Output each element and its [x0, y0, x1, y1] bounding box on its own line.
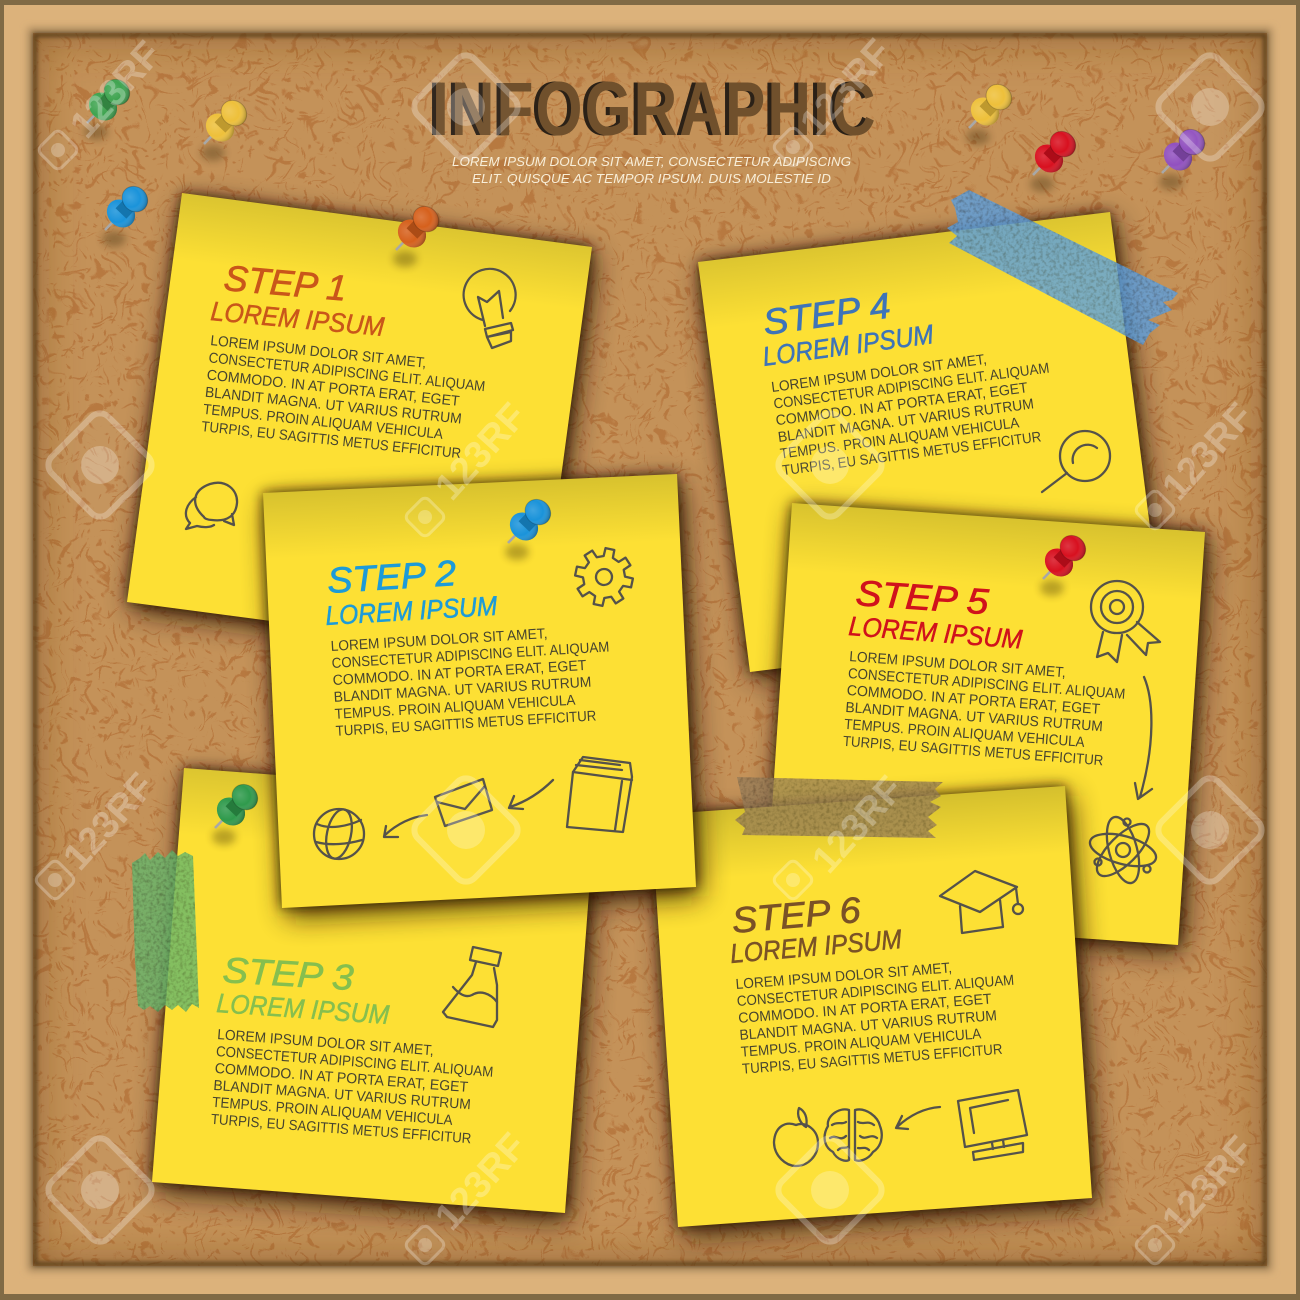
step 1 body text: BLANDIT MAGNA. UT VARIUS RUTRUM — [204, 385, 462, 428]
step 5 body text: TURPIS, EU SAGITTIS METUS EFFICITUR — [842, 734, 1104, 769]
icon: book — [567, 757, 632, 832]
panel: step 6 note — [651, 786, 1097, 1236]
step 4 body text: CONSECTETUR ADIPISCING ELIT. ALIQUAM — [773, 360, 1050, 413]
step 2 body text: TURPIS, EU SAGITTIS METUS EFFICITUR — [335, 708, 597, 740]
step 3 body text: LOREM IPSUM DOLOR SIT AMET, — [217, 1027, 434, 1059]
tape: green — [132, 850, 199, 1012]
watermark: 123RF — [1154, 396, 1262, 508]
arrow: computer to brain — [896, 1107, 940, 1129]
step 4 body text: TURPIS, EU SAGITTIS METUS EFFICITUR — [781, 429, 1042, 479]
step 6 body text: BLANDIT MAGNA. UT VARIUS RUTRUM — [739, 1008, 997, 1044]
title: INFOGRAPHIC — [428, 66, 874, 152]
icon: envelope — [435, 779, 492, 826]
step 3 body text: COMMODO. IN AT PORTA ERAT, EGET — [214, 1061, 469, 1096]
step 6 heading: STEP 6 — [730, 889, 863, 941]
step 3 body text: TEMPUS. PROIN ALIQUAM VEHICULA — [212, 1095, 453, 1129]
step 2 body text — [330, 623, 614, 740]
step 6 body text: LOREM IPSUM DOLOR SIT AMET, — [735, 960, 953, 993]
icon: flask — [443, 947, 501, 1027]
step 2 body text: BLANDIT MAGNA. UT VARIUS RUTRUM — [333, 675, 592, 706]
step 4 subheading: LOREM IPSUM — [761, 319, 936, 372]
watermark: 123RF — [1154, 1129, 1262, 1241]
icon: award ribbon — [1091, 581, 1160, 662]
icon: light bulb — [464, 269, 516, 348]
panel: step 4 note — [698, 212, 1166, 680]
step 4 body text — [770, 344, 1059, 479]
step 6 body text: TEMPUS. PROIN ALIQUAM VEHICULA — [740, 1026, 982, 1061]
step 5 body text: BLANDIT MAGNA. UT VARIUS RUTRUM — [845, 700, 1103, 735]
step 5 heading: STEP 5 — [854, 572, 991, 622]
icon: globe — [314, 807, 364, 861]
step 4 body text: BLANDIT MAGNA. UT VARIUS RUTRUM — [777, 396, 1035, 446]
subtitle: ELIT. QUISQUE AC TEMPOR IPSUM. DUIS MOLESTIE ID — [472, 172, 831, 186]
step 5 body text: TEMPUS. PROIN ALIQUAM VEHICULA — [844, 717, 1085, 751]
watermark: 123RF — [427, 396, 535, 508]
title: INFOGRAPHIC — [432, 66, 878, 152]
icon: computer — [958, 1090, 1027, 1160]
tape: blue — [947, 190, 1178, 345]
step 1 body text: LOREM IPSUM DOLOR SIT AMET, — [210, 333, 427, 372]
step 4 body text: LOREM IPSUM DOLOR SIT AMET, — [770, 352, 988, 396]
pin: red top right — [1022, 125, 1082, 192]
step 3 heading: STEP 3 — [222, 949, 355, 998]
step 1 subheading: LOREM IPSUM — [209, 296, 386, 342]
icon: apple — [774, 1108, 818, 1166]
step 2 body text: CONSECTETUR ADIPISCING ELIT. ALIQUAM — [331, 640, 610, 672]
step 3 body text: CONSECTETUR ADIPISCING ELIT. ALIQUAM — [215, 1044, 494, 1081]
step 3 subheading: LOREM IPSUM — [216, 988, 391, 1030]
step 5 body text — [842, 649, 1127, 771]
watermark: 123RF — [792, 32, 900, 144]
icon: magnifier — [1042, 431, 1110, 492]
step 6 body text: TURPIS, EU SAGITTIS METUS EFFICITUR — [742, 1042, 1003, 1078]
step 1 body text: CONSECTETUR ADIPISCING ELIT. ALIQUAM — [208, 350, 486, 395]
step 6 body text — [735, 956, 1020, 1078]
watermark: 123RF — [427, 1126, 535, 1238]
step 5 subheading: LOREM IPSUM — [848, 611, 1024, 655]
icon: gear — [570, 543, 638, 611]
step 1 body text: COMMODO. IN AT PORTA ERAT, EGET — [206, 367, 460, 410]
step 1 heading: STEP 1 — [222, 257, 348, 309]
step 2 heading: STEP 2 — [326, 552, 457, 601]
arrow: envelope to globe — [384, 815, 427, 837]
pin: orange on step 1 — [385, 200, 445, 267]
icon: brain — [825, 1109, 882, 1161]
pin: blue on step 2 — [497, 493, 557, 560]
pin: blue top left — [94, 180, 154, 247]
step 6 body text: COMMODO. IN AT PORTA ERAT, EGET — [738, 991, 992, 1027]
step 1 body text: TEMPUS. PROIN ALIQUAM VEHICULA — [202, 402, 444, 443]
icon: graduation cap — [940, 871, 1023, 933]
step 2 body text: LOREM IPSUM DOLOR SIT AMET, — [330, 626, 548, 655]
watermark: 123RF — [55, 766, 163, 878]
pin: red on step 5 — [1032, 529, 1092, 596]
pin: purple top right — [1151, 123, 1211, 190]
arrow: book to envelope — [509, 780, 553, 809]
step 4 body text: TEMPUS. PROIN ALIQUAM VEHICULA — [779, 415, 1021, 463]
watermark: 123RF — [62, 34, 170, 146]
step 1 body text: TURPIS, EU SAGITTIS METUS EFFICITUR — [201, 419, 462, 462]
icon: speech bubbles — [186, 483, 237, 529]
icon: atom — [1087, 814, 1159, 886]
step 2 subheading: LOREM IPSUM — [325, 591, 499, 631]
step 3 body text: BLANDIT MAGNA. UT VARIUS RUTRUM — [213, 1078, 471, 1113]
step 4 heading: STEP 4 — [760, 285, 893, 343]
step 6 subheading: LOREM IPSUM — [729, 924, 903, 969]
step 3 body text — [210, 1027, 495, 1149]
panel: step 5 note — [765, 503, 1209, 953]
pin: yellow top right — [958, 78, 1018, 145]
step 3 body text: TURPIS, EU SAGITTIS METUS EFFICITUR — [210, 1112, 472, 1147]
step 1 body text — [201, 333, 488, 464]
step 2 body text: TEMPUS. PROIN ALIQUAM VEHICULA — [334, 693, 576, 723]
panel: step 1 note — [127, 193, 596, 664]
watermark: 123RF — [804, 769, 912, 881]
pin: yellow top left — [193, 94, 253, 161]
step 5 body text: CONSECTETUR ADIPISCING ELIT. ALIQUAM — [847, 666, 1126, 703]
panel: step 3 note — [152, 768, 600, 1222]
subtitle: LOREM IPSUM DOLOR SIT AMET, CONSECTETUR ADIPISCING — [452, 155, 851, 169]
pin: green on step 3 — [204, 778, 264, 845]
step 5 body text: COMMODO. IN AT PORTA ERAT, EGET — [846, 683, 1101, 718]
pin: green top left — [76, 73, 136, 140]
step 2 body text: COMMODO. IN AT PORTA ERAT, EGET — [332, 658, 587, 689]
step 5 body text: LOREM IPSUM DOLOR SIT AMET, — [849, 649, 1066, 681]
step 6 body text: CONSECTETUR ADIPISCING ELIT. ALIQUAM — [736, 973, 1015, 1010]
subtitle — [452, 155, 851, 186]
step 4 body text: COMMODO. IN AT PORTA ERAT, EGET — [775, 380, 1029, 429]
panel: step 2 note — [263, 474, 701, 917]
arrow: ribbon to atom — [1135, 677, 1152, 799]
tape: brown — [735, 777, 943, 838]
